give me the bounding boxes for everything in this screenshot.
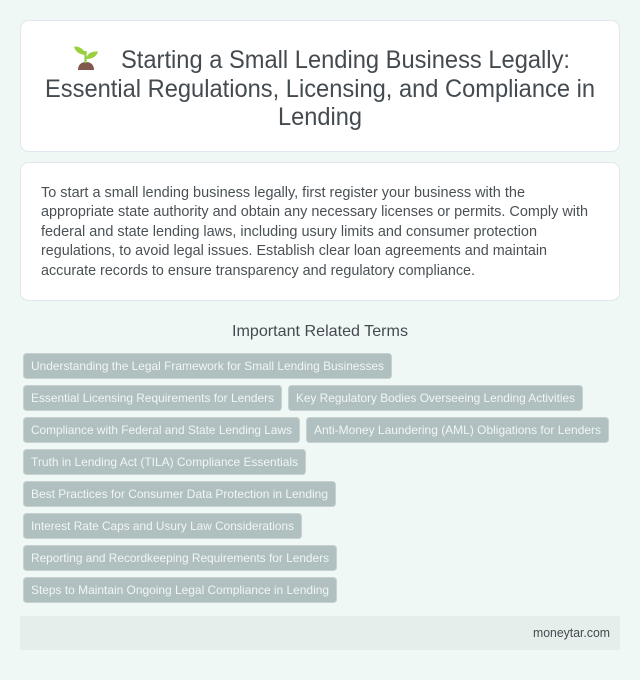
paragraph text: regulations, to avoid legal issues. Establish clear loan agreements and maintain <box>41 243 547 259</box>
tag: Best Practices for Consumer Data Protection in Lending <box>31 487 328 501</box>
tag <box>24 514 302 538</box>
title text <box>45 46 595 131</box>
tag: Interest Rate Caps and Usury Law Considerations <box>31 519 294 533</box>
title text: Starting a Small Lending Business Legally: <box>121 46 570 74</box>
tag <box>24 386 282 410</box>
heading: important related terms: Important Related Terms <box>232 323 408 340</box>
tag: Steps to Maintain Ongoing Legal Compliance in Lending <box>31 583 329 597</box>
tag: Understanding the Legal Framework for Small Lending Businesses <box>31 359 384 373</box>
tag <box>288 386 582 410</box>
tag: Reporting and Recordkeeping Requirements for Lenders <box>31 551 329 565</box>
tag <box>24 354 392 378</box>
tag <box>24 418 300 442</box>
panel: introduction paragraph <box>20 162 620 300</box>
tag <box>24 450 306 474</box>
footer: moneytar.com <box>533 626 610 640</box>
tag: Truth in Lending Act (TILA) Compliance Essentials <box>31 455 298 469</box>
panel: title card <box>20 20 620 152</box>
title text: Lending <box>278 103 362 131</box>
paragraph text: accurate records to ensure transparency and regulatory compliance. <box>41 263 475 279</box>
tag: Key Regulatory Bodies Overseeing Lending Activities <box>296 391 575 405</box>
paragraph text <box>41 185 588 279</box>
paragraph text: appropriate state authority and obtain any necessary licenses or permits. Comply with <box>41 204 588 220</box>
tag <box>24 482 336 506</box>
tag: Compliance with Federal and State Lending Laws <box>31 423 292 437</box>
tag <box>24 578 336 602</box>
paragraph text: federal and state lending laws, including usury limits and consumer protection <box>41 224 537 240</box>
tag <box>306 418 608 442</box>
icon: seedling <box>74 46 98 70</box>
tag: Anti-Money Laundering (AML) Obligations for Lenders <box>314 423 601 437</box>
tag: Essential Licensing Requirements for Lenders <box>31 391 274 405</box>
paragraph text: To start a small lending business legally, first register your business with the <box>41 185 525 201</box>
tag list <box>24 354 608 602</box>
title text: Essential Regulations, Licensing, and Compliance in <box>45 75 595 103</box>
tag <box>24 546 336 570</box>
footer <box>20 616 620 650</box>
